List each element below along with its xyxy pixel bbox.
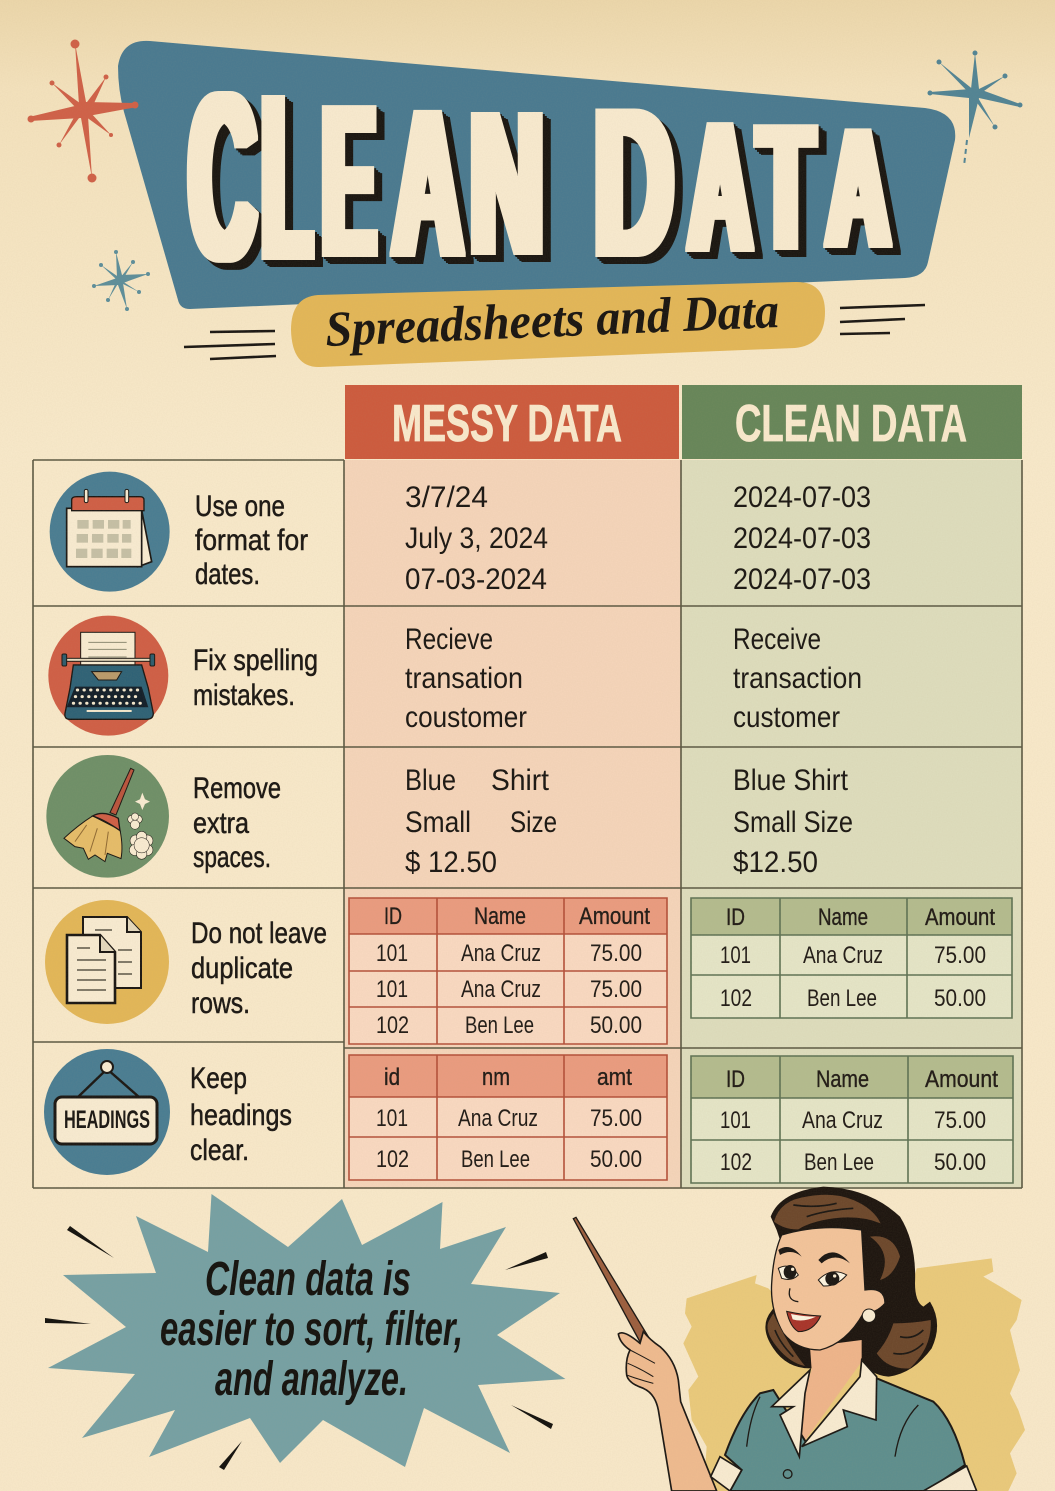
icon: calendar — [50, 472, 170, 592]
label: keep headings clear: headings — [190, 1099, 292, 1132]
row 3: spaces — [46, 755, 853, 879]
title: CLEAN DATA: N — [470, 70, 544, 296]
messy duplicate table — [349, 898, 667, 1044]
row 4: duplicates — [45, 898, 1012, 1044]
header: messy data: MESSY DATA — [392, 395, 622, 453]
messy dates: 07-03-2024 — [405, 563, 547, 596]
messy spelling — [405, 623, 527, 734]
messy spaces — [405, 764, 557, 879]
clean dates: 2024-07-03 — [733, 522, 871, 555]
clean spelling: customer — [733, 701, 840, 734]
clean duplicate table: Ben Lee — [807, 985, 877, 1012]
clean headings table: 50.00 — [934, 1149, 986, 1176]
messy duplicate table: 75.00 — [590, 976, 642, 1003]
label: remove extra spaces: spaces. — [193, 841, 271, 874]
messy headings table: Ben Lee — [461, 1146, 530, 1173]
title: CLEAN DATA: L — [262, 47, 311, 309]
label: do not leave duplicate rows: rows. — [191, 987, 250, 1020]
row 5: headings — [44, 1049, 1013, 1183]
clean dates — [733, 481, 871, 596]
callout text — [160, 1253, 463, 1406]
messy duplicate table: ID — [384, 903, 402, 930]
callout text: and analyze. — [215, 1353, 408, 1406]
title: CLEAN DATA: A — [393, 68, 462, 300]
icon: large red starburst — [28, 40, 138, 182]
clean spaces: Blue Shirt — [733, 764, 849, 797]
subtitle text: Spreadsheets and Data — [324, 282, 780, 357]
row 1: dates — [50, 472, 871, 596]
messy duplicate table: Amount — [579, 903, 650, 930]
clean duplicate table: 102 — [720, 985, 752, 1012]
table grid lines — [33, 460, 1022, 1188]
clean headings table: Ben Lee — [804, 1149, 874, 1176]
callout: starburst — [48, 1194, 566, 1467]
clean headings table: 102 — [720, 1149, 752, 1176]
messy dates: July 3, 2024 — [405, 522, 548, 555]
icon: headings sign — [44, 1049, 170, 1175]
messy spelling: transation — [405, 662, 523, 695]
label: fix spelling mistakes — [193, 644, 318, 712]
icon: headings sign: HEADINGS — [64, 1106, 150, 1134]
messy duplicate table: 75.00 — [590, 940, 642, 967]
clean spaces: $12.50 — [733, 846, 818, 879]
messy spaces: Blue — [405, 764, 456, 797]
icon: small teal starburst — [92, 250, 150, 311]
messy duplicate table: 102 — [376, 1012, 409, 1039]
messy dates: 3/7/24 — [405, 481, 488, 514]
label: use one format for dates: Use one — [195, 490, 285, 523]
label: do not leave duplicate rows: duplicate — [191, 952, 293, 985]
messy column background — [344, 460, 681, 1189]
clean column background — [681, 460, 1022, 1189]
messy headings table: nm — [482, 1064, 510, 1091]
messy duplicate table: Ana Cruz — [461, 976, 541, 1003]
messy spelling: Recieve — [405, 623, 493, 656]
label: use one format for dates: dates. — [195, 558, 260, 591]
messy headings table: 75.00 — [590, 1105, 642, 1132]
clean headings table: Ana Cruz — [802, 1107, 883, 1134]
sleeve cuffs — [711, 1457, 977, 1491]
title: CLEAN DATA: A — [827, 95, 889, 283]
callout text: easier to sort, filter, — [160, 1303, 463, 1356]
title: CLEAN DATA: E — [322, 61, 375, 301]
clean duplicate table: 101 — [720, 942, 751, 969]
hand finger lines — [627, 1350, 655, 1383]
yellow brush backdrop — [683, 1258, 1025, 1491]
clean duplicate table: Ana Cruz — [803, 942, 883, 969]
burst accent marks — [45, 1226, 553, 1470]
messy duplicate table: Ana Cruz — [461, 940, 541, 967]
clean headings table: Name — [816, 1066, 869, 1093]
label: fix spelling mistakes: mistakes. — [193, 679, 295, 712]
label: remove extra spaces — [193, 772, 281, 874]
messy spaces: Size — [510, 806, 557, 839]
label: use one format for dates: format for — [195, 524, 308, 557]
clean spelling — [733, 623, 862, 734]
clean spelling: transaction — [733, 662, 862, 695]
messy spaces: Shirt — [491, 764, 550, 797]
clean headings table — [691, 1056, 1013, 1183]
messy duplicate table: 101 — [376, 976, 408, 1003]
messy headings table: id — [384, 1064, 400, 1091]
messy headings table: 101 — [376, 1105, 408, 1132]
clean duplicate table — [691, 898, 1012, 1018]
messy headings table: 50.00 — [590, 1146, 642, 1173]
messy spelling: coustomer — [405, 701, 527, 734]
label: keep headings clear: clear. — [190, 1134, 249, 1167]
row 2: spelling — [48, 616, 862, 736]
clean duplicate table: 75.00 — [934, 942, 986, 969]
label: use one format for dates — [195, 490, 308, 591]
messy headings table: 102 — [376, 1146, 409, 1173]
face — [771, 1228, 885, 1350]
clean spelling: Receive — [733, 623, 821, 656]
clean duplicate table: 50.00 — [934, 985, 986, 1012]
speed lines left — [184, 331, 276, 359]
label: do not leave duplicate rows — [191, 917, 327, 1020]
header: messy data — [345, 385, 679, 459]
speed lines right — [840, 305, 925, 334]
clean spaces — [733, 764, 853, 879]
label: remove extra spaces: Remove — [193, 772, 281, 805]
title: CLEAN DATA: T — [758, 88, 814, 286]
messy spaces: Small — [405, 806, 471, 839]
subtitle pill — [291, 282, 825, 367]
messy duplicate table: 101 — [376, 940, 408, 967]
messy headings table — [349, 1055, 667, 1180]
clean duplicate table: Name — [818, 904, 868, 931]
collar — [772, 1360, 877, 1457]
arm and hand — [618, 1332, 717, 1491]
messy duplicate table: Name — [474, 903, 526, 930]
facial features — [778, 1247, 876, 1332]
illustration: woman with pointer — [573, 1187, 1025, 1491]
pointer stick — [573, 1217, 659, 1362]
clean headings table: 101 — [720, 1107, 751, 1134]
icon: typewriter — [48, 616, 168, 736]
messy duplicate table: Ben Lee — [465, 1012, 534, 1039]
label: remove extra spaces: extra — [193, 807, 249, 840]
hair highlights — [767, 1195, 931, 1368]
dress seams and button — [747, 1397, 918, 1478]
clean spaces: Small Size — [733, 806, 853, 839]
clean headings table: Amount — [925, 1066, 998, 1093]
neck — [802, 1340, 862, 1445]
title: CLEAN DATA — [189, 45, 889, 310]
header: clean data — [682, 385, 1022, 459]
clean duplicate table: ID — [726, 904, 745, 931]
clean duplicate table: Amount — [925, 904, 995, 931]
clean dates: 2024-07-03 — [733, 563, 871, 596]
title: CLEAN DATA: C — [189, 45, 255, 310]
label: do not leave duplicate rows: Do not leave — [191, 917, 327, 950]
messy headings table: Ana Cruz — [458, 1105, 538, 1132]
clean dates: 2024-07-03 — [733, 481, 871, 514]
messy duplicate table: 50.00 — [590, 1012, 642, 1039]
title banner — [118, 41, 955, 309]
title: CLEAN DATA: D — [594, 65, 673, 300]
messy headings table: amt — [597, 1064, 632, 1091]
label: fix spelling mistakes: Fix spelling — [193, 644, 318, 677]
icon: duplicate documents — [45, 900, 169, 1024]
icon: large teal starburst — [928, 50, 1022, 166]
comparison table — [33, 385, 1022, 1189]
title: CLEAN DATA: A — [689, 86, 751, 290]
hair back — [765, 1187, 937, 1377]
icon: broom — [46, 755, 169, 878]
dress — [725, 1378, 965, 1491]
callout text: Clean data is — [205, 1253, 411, 1306]
hair streaks — [775, 1203, 923, 1357]
clean headings table: ID — [726, 1066, 745, 1093]
label: keep headings clear: Keep — [190, 1062, 247, 1095]
label: keep headings clear — [190, 1062, 292, 1167]
clean headings table: 75.00 — [934, 1107, 986, 1134]
messy dates — [405, 481, 548, 596]
messy spaces: $ 12.50 — [405, 846, 497, 879]
